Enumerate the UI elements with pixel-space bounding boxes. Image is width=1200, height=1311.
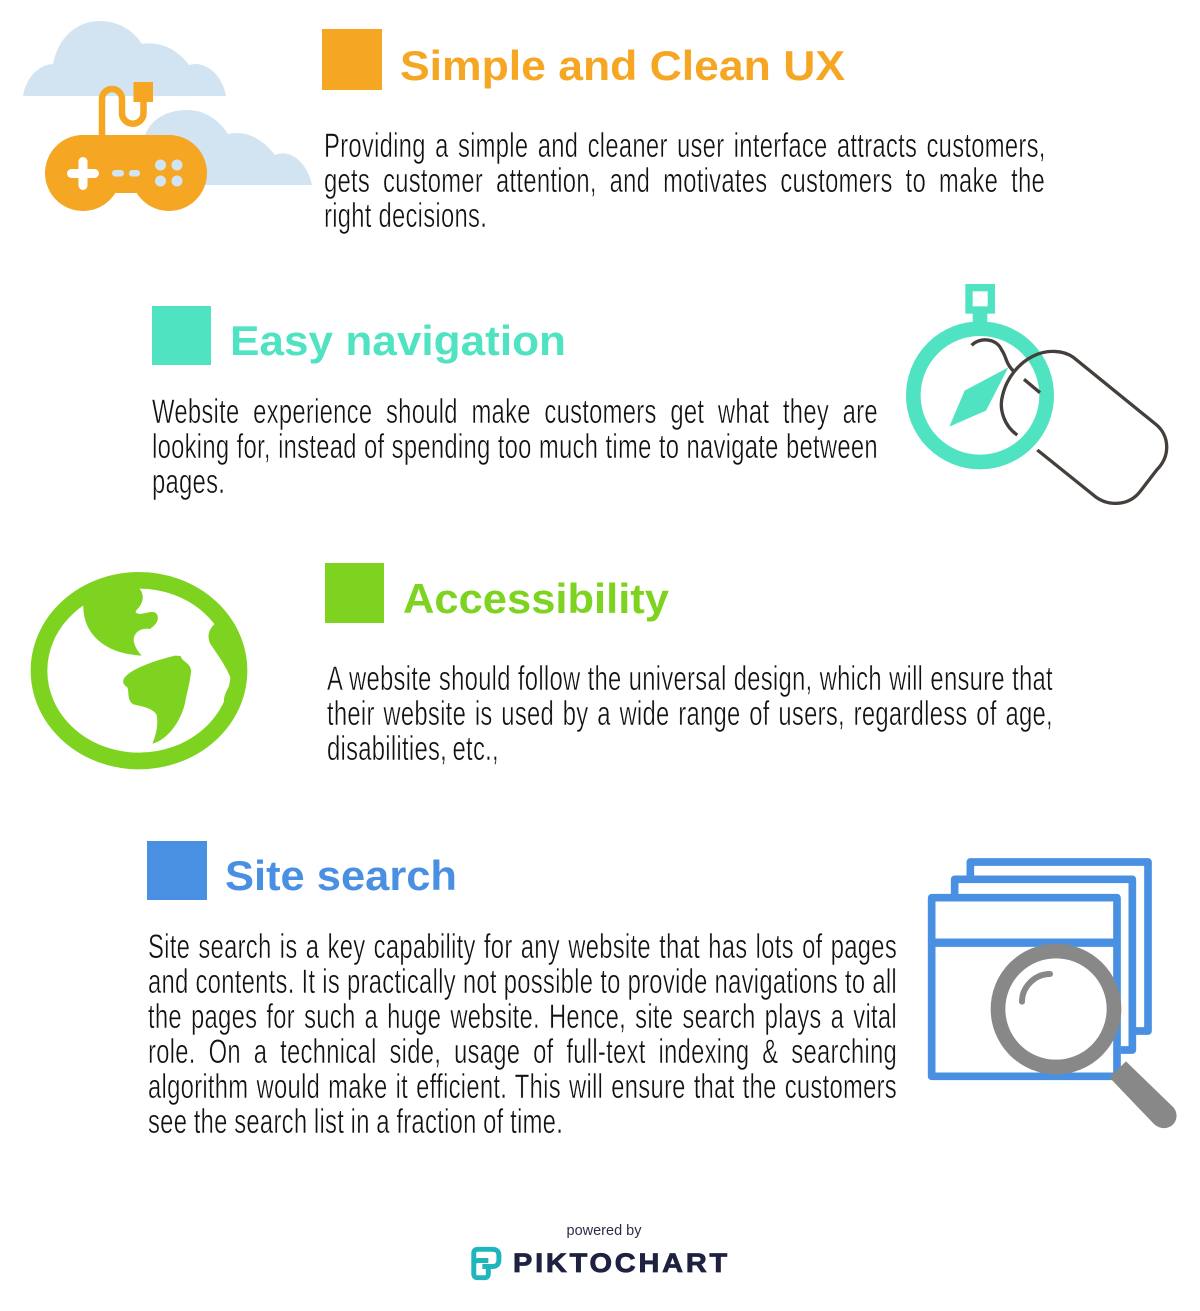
text block: Website experience should make customers get what they are (152, 393, 878, 431)
heading: Simple and Clean UX (400, 42, 845, 89)
text block: see the search list in a fraction of time. (148, 1103, 563, 1141)
text block: Providing a simple and cleaner user interface attracts customers, (324, 127, 1046, 165)
text block: pages. (152, 463, 225, 501)
text block: Site search is a key capability for any website that has lots of pages (148, 928, 897, 966)
wordmark: PIKTOCHART (513, 1248, 730, 1278)
icon: globe (30, 572, 248, 770)
text block: role. On a technical side, usage of full-text indexing & searching (148, 1033, 897, 1071)
text block: gets customer attention, and motivates customers to make the (324, 162, 1045, 200)
heading: Easy navigation (230, 317, 566, 364)
icon: game controller with clouds (23, 21, 312, 211)
icon: stopwatch and mouse (906, 284, 1168, 505)
heading: Site search (225, 852, 457, 899)
colour square (322, 29, 382, 90)
text block: disabilities, etc., (327, 730, 499, 768)
panel: Simple and Clean UX (23, 21, 1046, 235)
text block: right decisions. (324, 197, 487, 235)
icon: pages and magnifying glass (928, 858, 1176, 1128)
panel: Site search (147, 841, 1176, 1141)
panel: Easy navigation (152, 284, 1168, 505)
colour square (152, 306, 211, 365)
text block: looking for, instead of spending too much time to navigate between (152, 428, 878, 466)
text block: the pages for such a huge website. Hence, site search plays a vital (148, 998, 897, 1036)
text block (324, 127, 1046, 235)
panel: Accessibility (30, 563, 1053, 770)
icon: Piktochart logo (471, 1246, 502, 1280)
text block: and contents. It is practically not possible to provide navigations to all (148, 963, 897, 1001)
text block (148, 928, 897, 1141)
text block (152, 393, 878, 501)
text block: their website is used by a wide range of users, regardless of age, (327, 695, 1053, 733)
text block: algorithm would make it efficient. This will ensure that the customers (148, 1068, 897, 1106)
colour square (147, 841, 207, 900)
text block: A website should follow the universal design, which will ensure that (327, 660, 1053, 698)
heading: Accessibility (403, 575, 670, 622)
text block (327, 660, 1053, 768)
colour square (325, 563, 384, 623)
footer: Piktochart branding (471, 1223, 730, 1280)
powered by label: powered by (567, 1223, 641, 1239)
